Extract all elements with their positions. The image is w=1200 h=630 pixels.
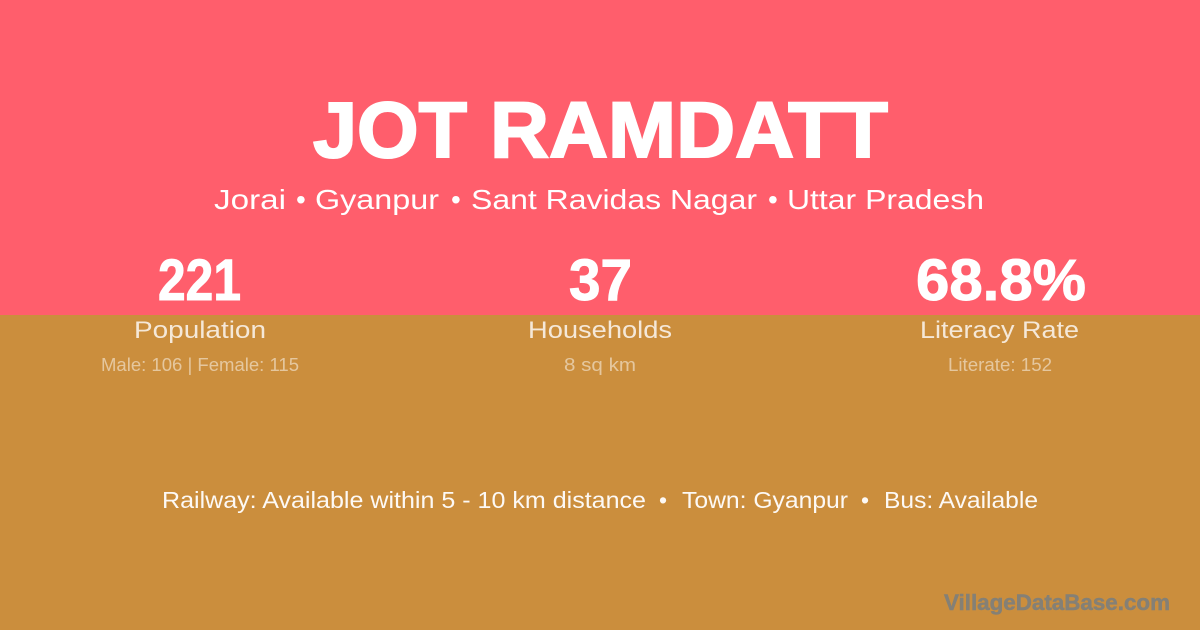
households value: 37	[569, 248, 632, 313]
connectivity line: Bus: Available	[884, 487, 1038, 513]
stat: households	[528, 248, 672, 375]
watermark: VillageDataBase.com	[944, 590, 1170, 615]
stat: literacy rate	[916, 248, 1086, 375]
literacy label: Literacy Rate	[920, 317, 1079, 344]
location subtitle: •	[296, 184, 306, 215]
panel: bottom ochre background	[0, 315, 1200, 630]
location subtitle: Sant Ravidas Nagar	[471, 184, 757, 215]
households label: Households	[528, 317, 672, 344]
panel: top red background	[0, 0, 1200, 315]
connectivity line: •	[861, 487, 869, 513]
population value: 221	[158, 248, 241, 313]
connectivity line: Railway: Available within 5 - 10 km distance	[162, 487, 646, 513]
population breakdown: Male: 106 | Female: 115	[101, 355, 299, 375]
literacy value: 68.8%	[916, 248, 1086, 313]
population label: Population	[134, 317, 266, 344]
literate count: Literate: 152	[948, 355, 1052, 375]
area: 8 sq km	[564, 355, 636, 375]
location subtitle: Uttar Pradesh	[787, 184, 984, 215]
connectivity line: Town: Gyanpur	[682, 487, 848, 513]
location subtitle: Gyanpur	[315, 184, 439, 215]
title	[313, 85, 888, 174]
location subtitle: •	[768, 184, 778, 215]
title: RAMDATT	[490, 85, 888, 174]
connectivity line: •	[659, 487, 667, 513]
connectivity line	[162, 487, 1038, 513]
location subtitle	[214, 184, 984, 215]
stat: population	[101, 248, 299, 375]
title: JOT	[313, 85, 467, 174]
location subtitle: •	[451, 184, 461, 215]
location subtitle: Jorai	[214, 184, 286, 215]
